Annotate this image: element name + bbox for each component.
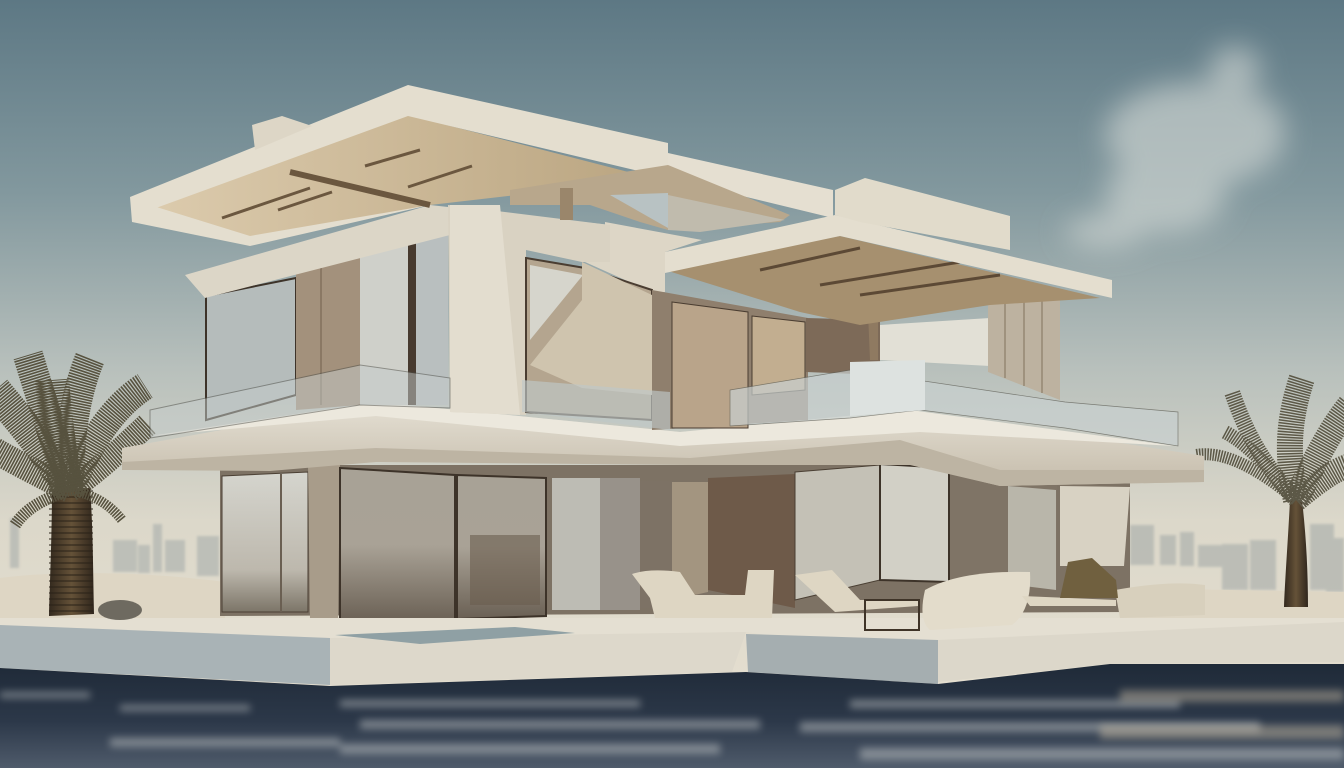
rocks left [98,600,142,620]
water surface [0,664,1344,768]
distant skyline left [10,518,219,576]
water [0,664,1344,768]
balcony furniture [850,360,925,416]
sofa right [1115,583,1205,618]
ground floor back wall [220,465,1130,616]
distant skyline right [1130,524,1344,592]
palm tree left [0,355,148,616]
roof chimney [252,116,312,150]
right upper curtain [988,298,1060,400]
palm fronds right [1196,378,1344,500]
armchair [795,570,918,612]
right roof slab [665,215,1112,298]
balcony glass rail [150,365,450,438]
wood wall [708,474,795,608]
palm trunk left [49,488,94,616]
right roof parapet [835,178,1010,250]
right glass panels [795,465,880,600]
top roof underside [150,115,640,236]
sofa left [632,570,774,618]
coffee table [865,600,919,630]
smoke cloud [1065,46,1285,248]
warm reflections [1100,690,1344,739]
upper floor left glass [206,278,296,420]
upper floor curtain [296,248,360,410]
lower slab top face [150,402,1175,446]
top roof extension [668,153,833,218]
ground floor window centre 1 [340,468,455,622]
ground left mullion [280,474,282,612]
lower balcony slab [122,402,1204,486]
ground floor curtains [552,478,708,610]
terrace front faces [0,625,330,685]
lounge furniture [632,570,1205,630]
centre right window [652,290,808,430]
lounger right [1022,596,1116,606]
lower slab underside shadow [122,440,1204,486]
top roof lip [130,170,430,246]
plunge pool [335,627,575,644]
terrace deck [0,618,1344,662]
centre window [526,258,652,420]
ground floor interior detail [470,535,540,605]
upper roof back wall [185,205,610,298]
roof slats [222,150,472,218]
large armchair [922,572,1030,630]
ground floor window left [222,472,308,612]
connecting wall behind roof [585,222,702,292]
concrete column [308,465,340,620]
centre protruding block [530,262,652,395]
ripples [0,692,1344,760]
stucco centre block [448,205,610,415]
right roof soffit [665,236,1100,325]
ground sand [0,573,1344,625]
plant [1060,558,1118,598]
top roof slab [130,85,668,212]
right upper window [880,318,990,366]
roof post [866,265,878,360]
villa building [122,85,1204,622]
roof support post [560,188,573,220]
ground floor window centre 2 [457,475,546,619]
palm fronds left [0,355,148,525]
palm trunk right [1284,500,1308,607]
palm tree right [1196,378,1344,607]
